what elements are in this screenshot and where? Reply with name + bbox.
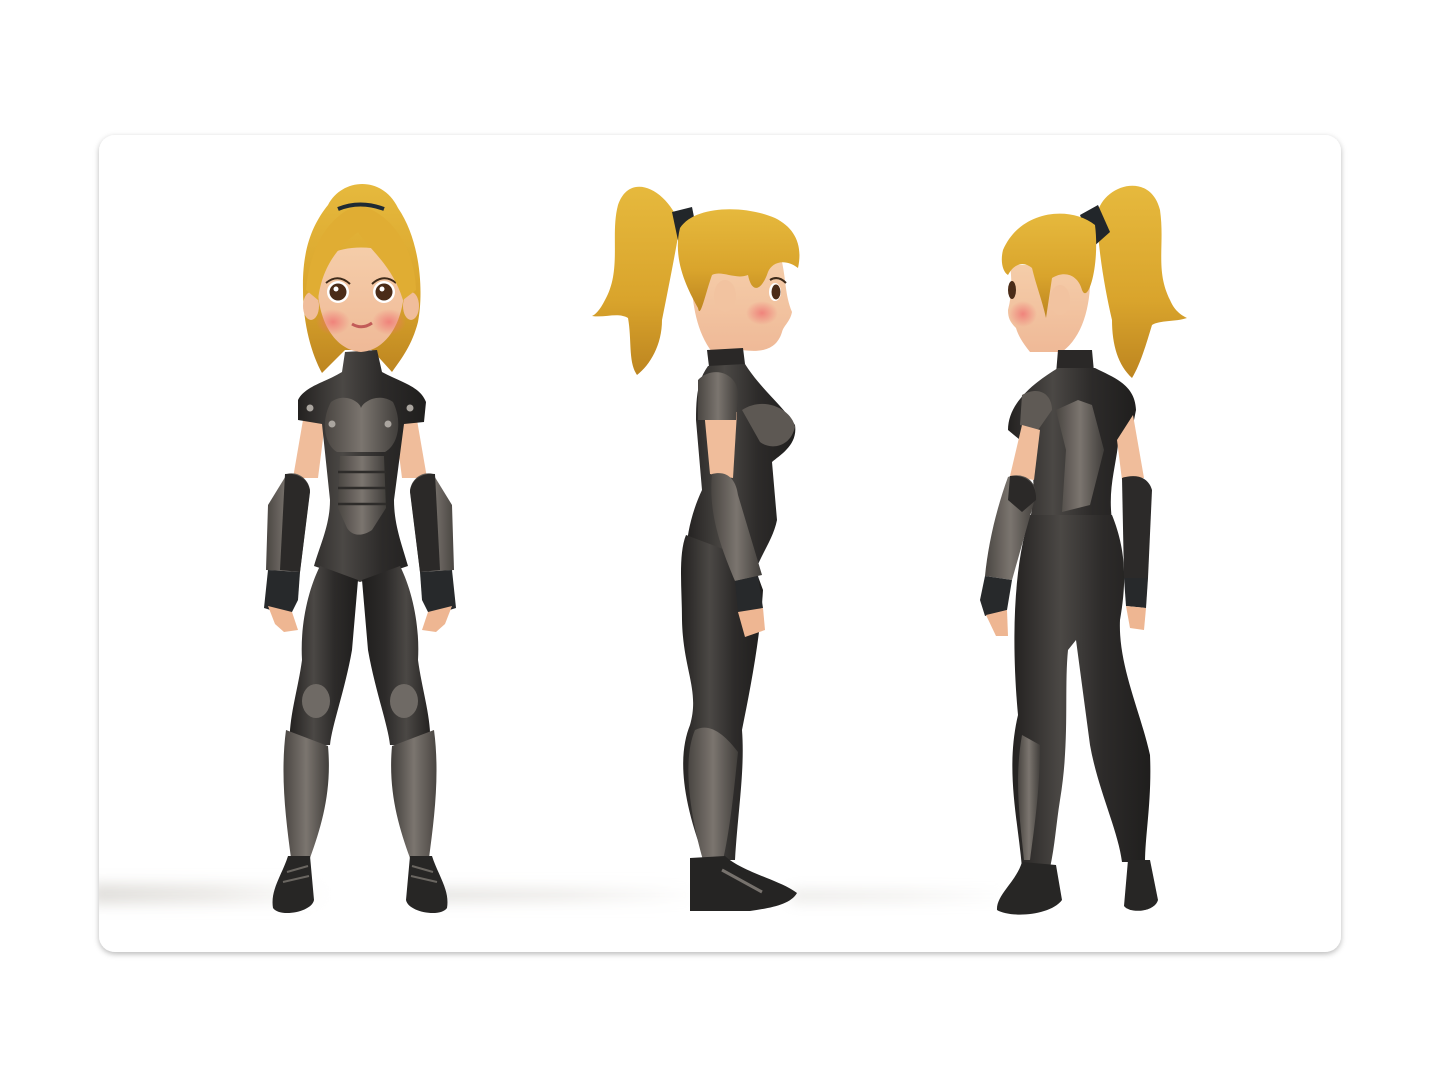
- head: [1008, 265, 1090, 352]
- glove and hand: [735, 576, 763, 612]
- shoes: [690, 856, 797, 911]
- left arm: [985, 475, 1036, 580]
- panel: white rounded card: [99, 135, 1341, 952]
- neck: [707, 348, 746, 375]
- right leg: [362, 566, 447, 913]
- legs: [681, 535, 763, 860]
- shoulder plate: [1020, 391, 1052, 430]
- right arm and glove: [394, 415, 456, 632]
- back armour: [1056, 400, 1104, 512]
- hair cap: [678, 209, 799, 311]
- figure: side view: [592, 187, 799, 911]
- chest armour: [325, 398, 398, 452]
- hips and legs: [1012, 515, 1150, 868]
- abdomen armour: [338, 456, 386, 535]
- right arm: [1122, 476, 1152, 578]
- boot: [273, 856, 314, 913]
- figure: back view: [980, 186, 1187, 915]
- face: [317, 248, 405, 352]
- shin guard: [688, 728, 738, 860]
- shin guard: [1018, 735, 1040, 860]
- left arm and glove: [264, 415, 326, 632]
- fringe: [306, 205, 416, 300]
- bare arms: [1010, 425, 1040, 480]
- left leg: [273, 566, 358, 913]
- ponytail: [592, 187, 680, 375]
- head: [692, 262, 792, 352]
- shin guard: [283, 730, 329, 858]
- torso back: [1008, 368, 1136, 520]
- figure: front view: [264, 184, 456, 913]
- torso: [686, 364, 795, 580]
- shoulder: [698, 372, 738, 420]
- neck: [1056, 350, 1094, 374]
- bare upper arm: [704, 410, 737, 478]
- hair cap: [1002, 214, 1096, 318]
- forearm armour: [711, 473, 762, 581]
- floor shadows: [90, 884, 1010, 904]
- boots: [997, 862, 1062, 915]
- neck and torso suit: [298, 350, 426, 582]
- shoulder rivets: [306, 404, 414, 428]
- character turnaround illustration: [96, 134, 1344, 958]
- back hair: [303, 184, 421, 373]
- eyes: [327, 281, 349, 303]
- ponytail: [1097, 186, 1187, 378]
